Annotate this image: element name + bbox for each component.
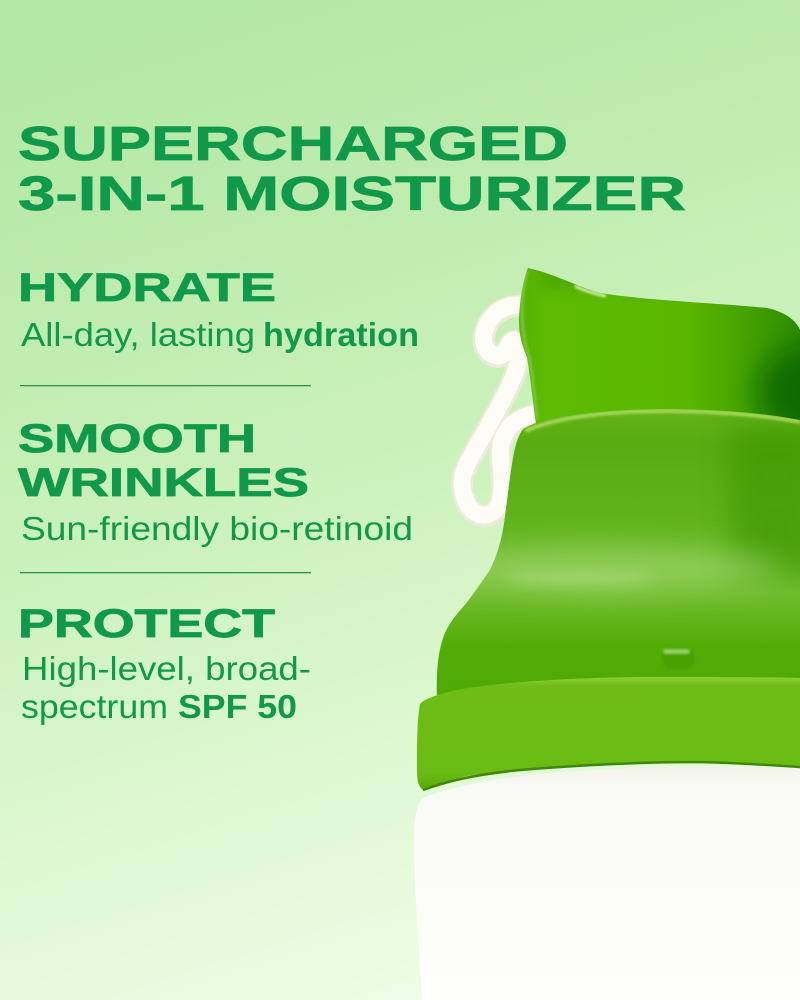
product bottle [414, 260, 800, 1000]
title: SUPERCHARGED [18, 118, 568, 171]
benefit: smooth wrinkles: WRINKLES [18, 461, 309, 505]
title [18, 118, 686, 221]
raised nub [662, 648, 695, 669]
benefit: smooth wrinkles [18, 417, 413, 547]
benefit: hydrate: All-day, lasting [21, 316, 255, 353]
benefit: smooth wrinkles: SMOOTH [18, 417, 256, 461]
bottle body [414, 767, 800, 1000]
benefit: protect: spectrum [21, 688, 168, 725]
benefit: protect: High-level, broad- [22, 650, 311, 687]
collar band [417, 677, 800, 790]
benefit: protect: PROTECT [18, 602, 275, 646]
benefit: hydrate [18, 266, 419, 353]
benefit: protect: SPF 50 [178, 688, 297, 725]
pump head [519, 268, 800, 424]
benefit: protect [18, 602, 311, 725]
cream squeeze [462, 305, 537, 516]
pump collar [420, 409, 800, 705]
title: 3-IN-1 MOISTURIZER [18, 168, 686, 221]
benefit: smooth wrinkles: Sun-friendly bio-retinoid [21, 510, 413, 547]
benefit: hydrate: HYDRATE [18, 266, 276, 310]
benefit: hydrate: hydration [263, 316, 419, 353]
